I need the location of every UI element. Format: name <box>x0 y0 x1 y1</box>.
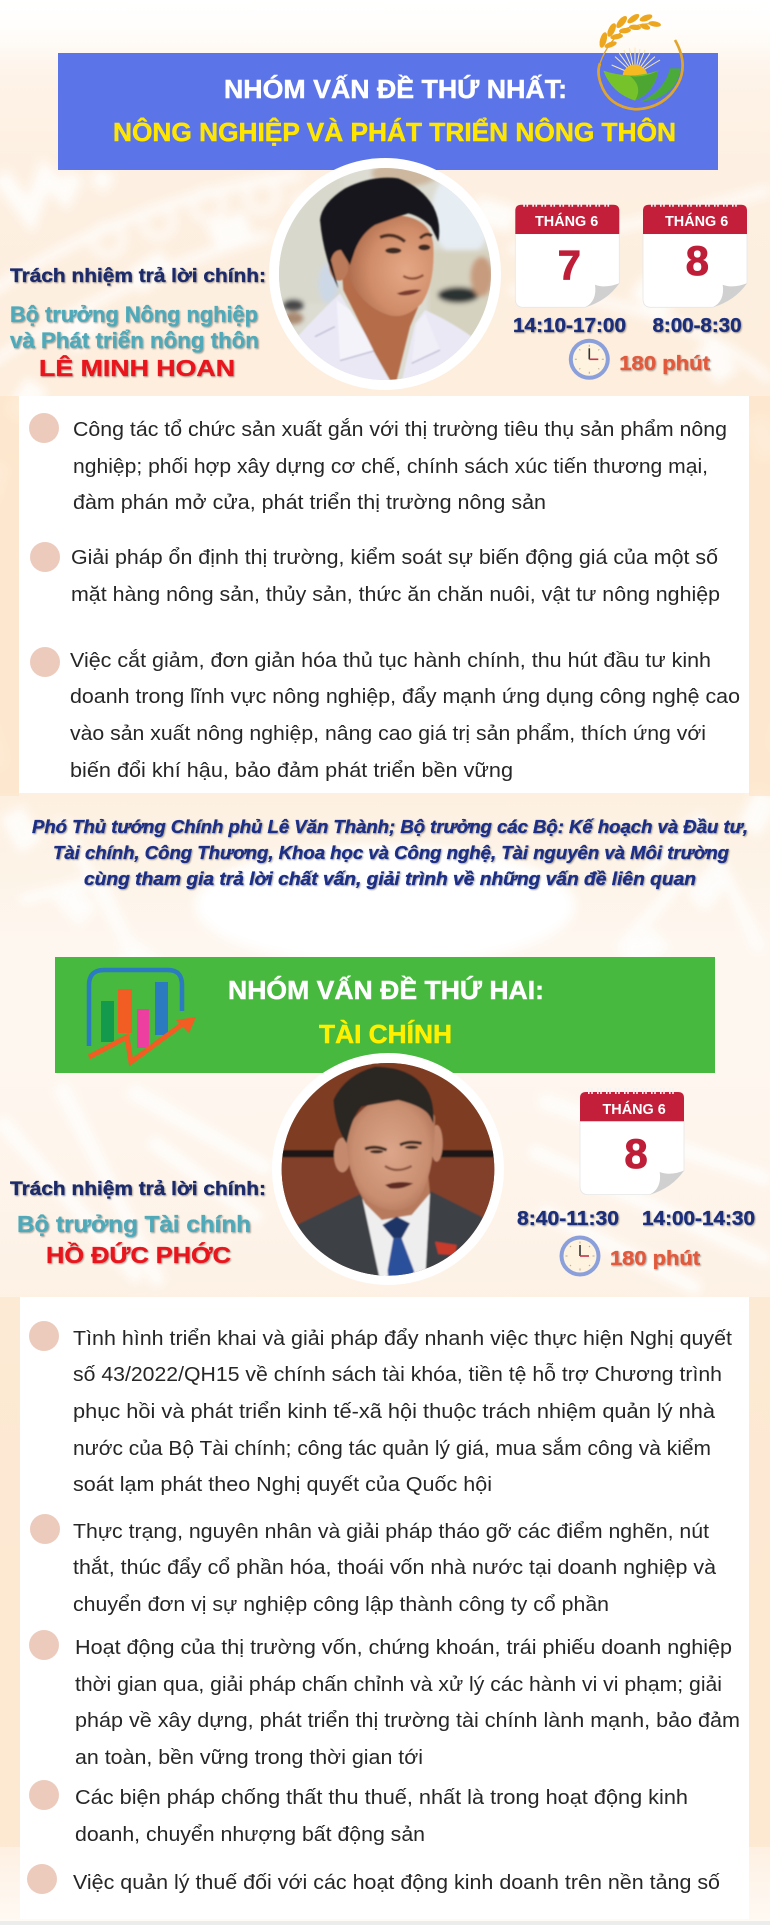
label: main responsibility: Trách nhiệm trả lời chính: <box>10 1178 266 1200</box>
item text: doanh, chuyển nhượng bất động sản <box>75 1823 425 1846</box>
heading: first issue group label: NHÓM VẤN ĐỀ THỨ NHẤT: <box>224 74 567 104</box>
item text: vào sản xuất nông nghiệp, nâng cao giá trị sản phẩm, thích ứng với <box>70 722 706 745</box>
item text: mặt hàng nông sản, thủy sản, thức ăn chăn nuôi, vật tư nông nghiệp <box>71 583 720 606</box>
item text: Thực trạng, nguyên nhân và giải pháp tháo gỡ các điểm nghẽn, nút <box>73 1520 709 1543</box>
role: minister of agriculture <box>10 302 259 353</box>
item text <box>70 649 740 782</box>
note: co-responders: Tài chính, Công Thương, Khoa học và Công nghệ, Tài nguyên và Môi trường <box>53 842 729 863</box>
bullet <box>30 1514 60 1544</box>
panel: issues of group one <box>19 396 749 793</box>
calendar month: THÁNG 6 <box>602 1101 666 1118</box>
panel: issues of group two <box>20 1297 749 1919</box>
duration two: 180 phút <box>610 1248 700 1270</box>
item text: đàm phán mở cửa, phát triển thị trường nông sản <box>73 491 546 514</box>
calendar: June 8 session <box>580 1091 684 1195</box>
item text <box>75 1786 688 1846</box>
item text: pháp về xây dựng, phát triển thị trường tài chính lành mạnh, bảo đảm <box>75 1709 740 1732</box>
label: main responsibility: Trách nhiệm trả lời chính: <box>10 265 266 287</box>
icon: agriculture logo <box>598 12 683 109</box>
icon: clock one <box>569 339 610 380</box>
item text: thắt, thúc đẩy cổ phần hóa, thoái vốn nhà nước tại doanh nghiệp và <box>73 1556 717 1579</box>
note: co-responders: Phó Thủ tướng Chính phủ Lê Văn Thành; Bộ trưởng các Bộ: Kế hoạch và Đầu tư, <box>32 816 748 837</box>
item: capital markets <box>29 1630 740 1769</box>
icon: growth chart <box>89 970 196 1062</box>
item text: thời gian qua, giải pháp chấn chỉnh và xử lý các hành vi vi phạm; giải <box>75 1673 722 1696</box>
heading: finance: TÀI CHÍNH <box>319 1020 452 1049</box>
banner: first issue group <box>58 53 718 170</box>
item: tax losses <box>29 1780 688 1846</box>
item text: Các biện pháp chống thất thu thuế, nhất là trong hoạt động kinh <box>75 1786 688 1809</box>
item text: nước của Bộ Tài chính; công tác quản lý giá, mua sắm công và kiểm <box>73 1437 711 1460</box>
time slots one: 8:00-8:30 <box>652 315 742 337</box>
role: minister of finance: Bộ trưởng Tài chính <box>17 1211 251 1237</box>
item text: doanh trong lĩnh vực nông nghiệp, đẩy mạnh ứng dụng công nghệ cao <box>70 685 740 708</box>
name: Lê Minh Hoan: LÊ MINH HOAN <box>39 354 235 381</box>
bullet <box>29 1321 59 1351</box>
item text: soát lạm phát theo Nghị quyết của Quốc hội <box>73 1473 492 1496</box>
calendar month: THÁNG 6 <box>665 213 728 230</box>
calendar: June 7 <box>515 204 619 307</box>
item text: nghiệp; phối hợp xây dựng cơ chế, chính sách xúc tiến thương mại, <box>73 455 708 478</box>
role: minister of agriculture: Bộ trưởng Nông nghiệp <box>10 302 258 327</box>
calendar: June 8 <box>643 204 747 307</box>
time slots two: 8:40-11:30 <box>517 1208 619 1230</box>
bullet <box>30 542 60 572</box>
item text: Công tác tổ chức sản xuất gắn với thị trường tiêu thụ sản phẩm nông <box>73 418 727 441</box>
item text: an toàn, bền vững trong thời gian tới <box>75 1746 423 1769</box>
item text: Việc cắt giảm, đơn giản hóa thủ tục hành chính, thu hút đầu tư kinh <box>70 649 711 672</box>
item: digital platforms tax <box>27 1864 720 1894</box>
item text <box>73 1327 732 1496</box>
item text: phục hồi và phát triển kinh tế-xã hội thuộc trách nhiệm quản lý nhà <box>73 1400 716 1423</box>
item: market stabilisation <box>30 542 720 606</box>
time slots two: 14:00-14:30 <box>642 1208 755 1230</box>
name: Hồ Đức Phớc: HỒ ĐỨC PHỚC <box>46 1241 231 1268</box>
item text: số 43/2022/QH15 về chính sách tài khóa, tiền tệ hỗ trợ Chương trình <box>73 1363 722 1386</box>
note: co-responders <box>32 816 748 889</box>
calendar date: 7 <box>558 241 581 288</box>
item text: Tình hình triển khai và giải pháp đẩy nhanh việc thực hiện Nghị quyết <box>73 1327 732 1350</box>
banner: second issue group <box>55 957 715 1073</box>
calendar month: THÁNG 6 <box>535 213 598 230</box>
time slots one <box>513 315 742 337</box>
note: co-responders: cùng tham gia trả lời chất vấn, giải trình về những vấn đề liên quan <box>84 868 696 889</box>
heading: second issue group label: NHÓM VẤN ĐỀ THỨ HAI: <box>228 975 544 1005</box>
item text <box>73 418 727 514</box>
bullet <box>27 1864 57 1894</box>
portrait: minister Lê Minh Hoan <box>269 158 501 390</box>
item: resolution 43 <box>29 1321 732 1496</box>
text block: lead responder two <box>10 1178 266 1268</box>
calendar date: 8 <box>686 237 709 284</box>
item text <box>73 1520 717 1616</box>
icon: clock two <box>560 1236 600 1276</box>
heading: agriculture and rural development: NÔNG NGHIỆP VÀ PHÁT TRIỂN NÔNG THÔN <box>113 117 676 147</box>
item text: Hoạt động của thị trường vốn, chứng khoán, trái phiếu doanh nghiệp <box>75 1636 732 1659</box>
item: administrative reform <box>30 647 740 782</box>
duration one: 180 phút <box>619 353 710 375</box>
item: production and market <box>29 413 727 514</box>
portrait: minister Hồ Đức Phớc <box>272 1053 504 1290</box>
text block: lead responder one <box>10 265 266 381</box>
item text: chuyển đơn vị sự nghiệp công lập thành công ty cổ phần <box>73 1593 609 1616</box>
bullet <box>30 647 60 677</box>
item: equitization <box>30 1514 717 1616</box>
time slots one: 14:10-17:00 <box>513 315 626 337</box>
item text <box>75 1636 740 1769</box>
item text <box>71 546 720 606</box>
bullet <box>29 1780 59 1810</box>
item text: Việc quản lý thuế đối với các hoạt động kinh doanh trên nền tảng số <box>73 1871 720 1894</box>
bullet <box>29 1630 59 1660</box>
calendar date: 8 <box>624 1130 648 1177</box>
time slots two <box>517 1208 755 1230</box>
bullet <box>29 413 59 443</box>
item text: biến đổi khí hậu, bảo đảm phát triển bền vững <box>70 759 513 782</box>
item text: Giải pháp ổn định thị trường, kiểm soát sự biến động giá của một số <box>71 546 718 569</box>
role: minister of agriculture: và Phát triển nông thôn <box>10 328 259 353</box>
